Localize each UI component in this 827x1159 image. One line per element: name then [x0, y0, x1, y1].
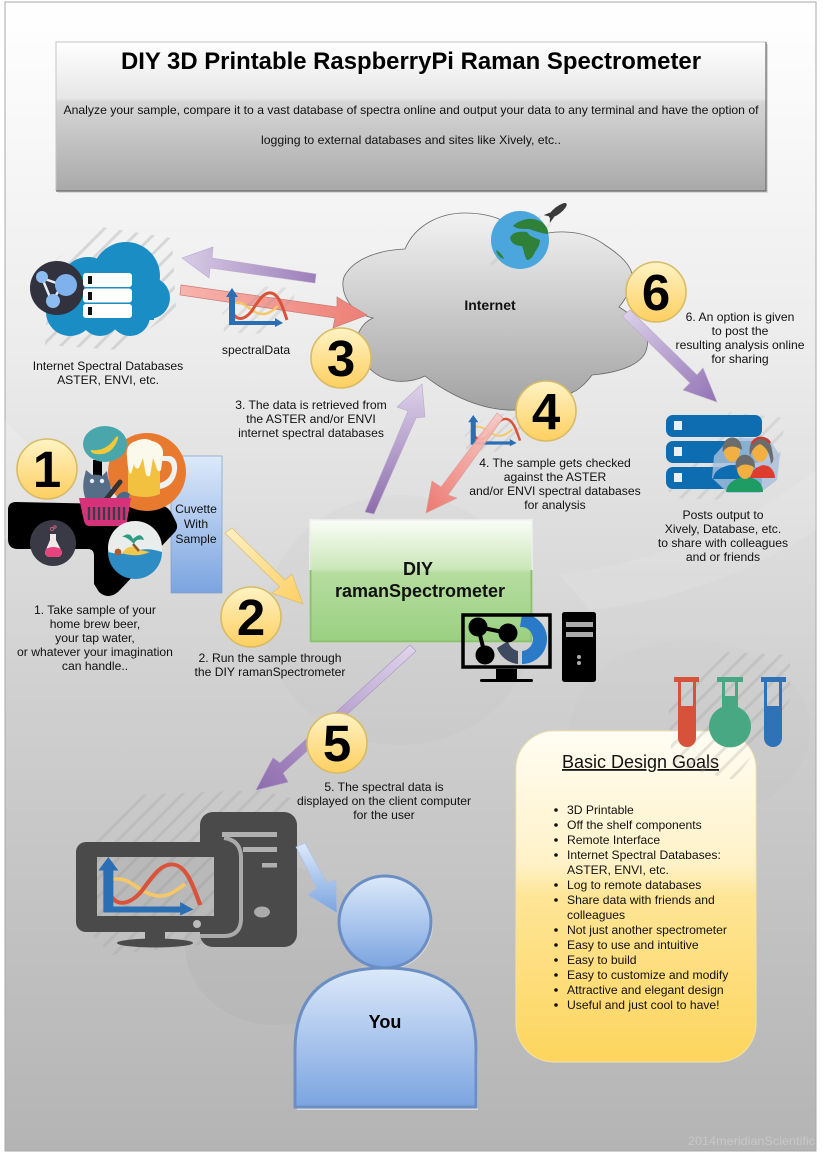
step 2 text: 2. Run the sample through — [198, 651, 342, 665]
step 3 badge: 3 — [327, 330, 355, 387]
black stem — [93, 460, 102, 476]
arrow: post online — [622, 310, 717, 402]
step 2 badge — [221, 587, 281, 647]
goals list: Remote Interface — [567, 833, 660, 847]
step 4 text: for analysis — [524, 498, 586, 512]
spectral data label: spectralData — [222, 343, 290, 357]
user head — [339, 876, 431, 968]
icon: raspberry pi computer — [463, 612, 596, 682]
goals list: Log to remote databases — [567, 878, 701, 892]
subtitle text: Analyze your sample, compare it to a vast database of spectra online and output your data to any terminal and have the option of — [64, 103, 759, 117]
step 5 text: for the user — [353, 808, 415, 822]
monitor — [76, 842, 235, 932]
step 2 text: the DIY ramanSpectrometer — [195, 665, 345, 679]
cuvette label: Sample — [175, 532, 217, 546]
step 1 text: 1. Take sample of your — [34, 603, 156, 617]
box label second line: ramanSpectrometer — [335, 581, 505, 601]
step 5 badge: 5 — [323, 715, 351, 772]
database label: ASTER, ENVI, etc. — [57, 373, 159, 387]
goals list: Not just another spectrometer — [567, 923, 727, 937]
icon: banana — [83, 426, 127, 462]
icon: shared servers and people — [666, 412, 785, 500]
subtitle second line: logging to external databases and sites like Xively, etc.. — [261, 133, 561, 147]
box label: DIY — [403, 559, 433, 579]
share output text: Xively, Database, etc. — [665, 522, 781, 536]
step 6 text: 6. An option is given — [686, 310, 794, 324]
arrow: spectrometer to client — [256, 645, 416, 790]
goals list: 3D Printable — [567, 803, 634, 817]
arrow: request to databases — [182, 247, 316, 283]
step 4 text: against the ASTER — [504, 470, 607, 484]
goals heading: Basic Design Goals — [562, 752, 719, 772]
step 5 text: 5. The spectral data is — [324, 780, 444, 794]
cuvette label: With — [184, 517, 208, 531]
icon: test tubes and flask — [668, 652, 790, 780]
step 3 text: internet spectral databases — [238, 426, 384, 440]
step 1 badge: 1 — [33, 441, 61, 498]
goals list: Internet Spectral Databases: — [567, 848, 721, 862]
goals list: Easy to build — [567, 953, 637, 967]
arrow: spectrometer to internet — [365, 384, 425, 514]
arrow: internet to spectrometer — [426, 413, 503, 513]
goals list: Useful and just cool to have! — [567, 998, 720, 1012]
arrow: data from databases — [180, 285, 367, 328]
step 5 badge — [307, 713, 367, 773]
cuvette label: Cuvette — [175, 502, 217, 516]
arrow: computer to user — [296, 843, 337, 913]
goals list: Easy to use and intuitive — [567, 938, 699, 952]
step 4 badge — [516, 381, 576, 441]
icon: client computer — [76, 790, 300, 955]
icon: analysis chart — [465, 413, 527, 452]
step 1 text: home brew beer, — [50, 617, 140, 631]
step 6 text: to post the — [712, 324, 769, 338]
DIY raman spectrometer box — [309, 519, 533, 643]
icon: cat in basket — [79, 470, 131, 526]
step 5 text: displayed on the client computer — [297, 794, 471, 808]
arrow: cuvette to spectrometer — [225, 528, 303, 604]
user body — [295, 968, 476, 1107]
icon: spectral data chart — [222, 286, 295, 334]
step 1 text: your tap water, — [55, 631, 135, 645]
step 1 badge — [17, 439, 77, 499]
step 6 text: resulting analysis online — [676, 338, 805, 352]
goals list — [554, 803, 729, 1012]
database label: Internet Spectral Databases — [33, 359, 183, 373]
share output text: to share with colleagues — [658, 536, 788, 550]
tower — [200, 812, 297, 947]
user figure — [295, 876, 478, 1110]
internet label: Internet — [464, 297, 516, 313]
background watermark shapes — [5, 420, 816, 1025]
user label: You — [369, 1012, 401, 1032]
icon: globe and rocket — [488, 200, 570, 272]
black callout shape — [8, 502, 177, 596]
step 1 text: can handle.. — [62, 659, 128, 673]
goals list: colleagues — [567, 908, 625, 922]
step 3 text: 3. The data is retrieved from — [235, 398, 387, 412]
step 1 text: or whatever your imagination — [17, 645, 173, 659]
screen chart — [98, 857, 200, 916]
step 4 badge: 4 — [532, 383, 561, 440]
title heading: DIY 3D Printable RaspberryPi Raman Spectrometer — [121, 48, 701, 75]
panel: basic design goals — [516, 731, 756, 1062]
goals list: Off the shelf components — [567, 818, 702, 832]
title panel — [56, 42, 768, 193]
share output text: and or friends — [686, 550, 760, 564]
goals list: Easy to customize and modify — [567, 968, 729, 982]
step 6 badge — [626, 262, 686, 322]
internet cloud — [343, 213, 648, 410]
step 4 text: and/or ENVI spectral databases — [469, 484, 641, 498]
step 2 badge: 2 — [237, 589, 265, 646]
goals list: ASTER, ENVI, etc. — [567, 863, 669, 877]
icon: flask — [30, 520, 76, 566]
step 3 text: the ASTER and/or ENVI — [246, 412, 376, 426]
icon: beer mug — [108, 433, 186, 511]
goals list: Share data with friends and — [567, 893, 715, 907]
step 6 text: for sharing — [711, 352, 769, 366]
share output text: Posts output to — [682, 508, 764, 522]
icon: spectral database cloud — [30, 226, 176, 350]
cuvette — [171, 456, 222, 593]
goals list: Attractive and elegant design — [567, 983, 724, 997]
step 4 text: 4. The sample gets checked — [479, 456, 631, 470]
step 6 badge: 6 — [642, 264, 670, 321]
footer credit: 2014meridianScientific — [688, 1134, 815, 1148]
step 3 badge — [311, 328, 371, 388]
icon: island — [108, 521, 162, 579]
step 1 sample icons — [8, 426, 186, 596]
